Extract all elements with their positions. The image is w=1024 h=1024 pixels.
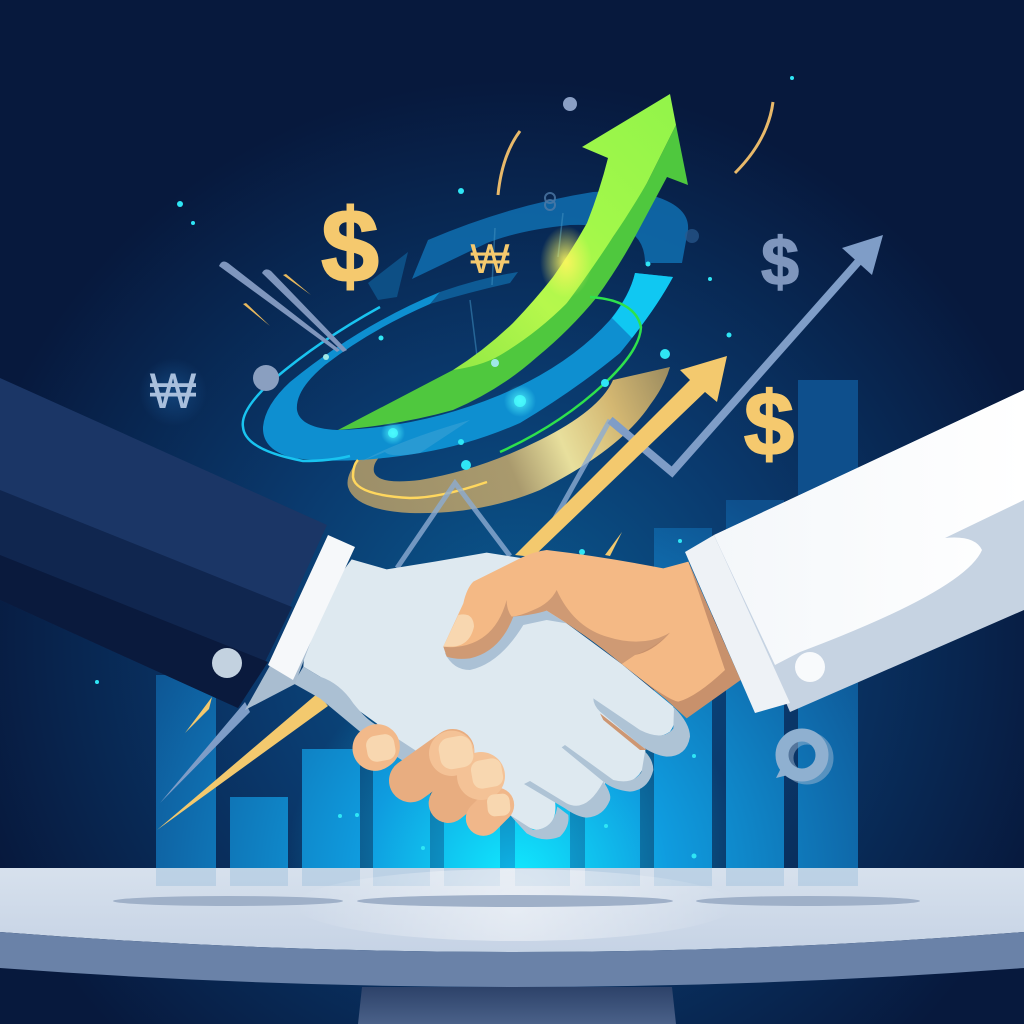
skin sliver under finger [600, 713, 647, 750]
right arm back shading [622, 562, 741, 718]
bottom finger three [448, 776, 482, 803]
right cuff [685, 535, 790, 713]
bottom finger four [483, 805, 497, 818]
dollar sign gold right: $ [744, 375, 794, 475]
floating circles [253, 97, 699, 391]
nails [365, 733, 511, 817]
gold arrow [157, 356, 727, 830]
left cuff [245, 535, 355, 710]
bottom finger two [411, 751, 453, 781]
finger three shadow [524, 781, 610, 818]
thin green orbit [500, 297, 641, 452]
low centre glow [280, 640, 750, 875]
left sleeve [0, 378, 327, 708]
speech ring icon [776, 735, 827, 778]
finger four shadow [510, 807, 569, 839]
skin hand [443, 550, 725, 702]
table shadows [113, 895, 920, 907]
table edge [0, 932, 1024, 987]
finger one shadow [593, 698, 690, 757]
trend line with arrow [397, 235, 883, 568]
won sign pale [139, 358, 207, 426]
table top [0, 868, 1024, 952]
particles [95, 76, 794, 858]
thumb shadow [445, 611, 567, 670]
pedestal [358, 987, 676, 1024]
lock icon faint [545, 193, 555, 210]
ring nodes [323, 354, 536, 445]
thin blue ring band [430, 272, 518, 304]
thumb nail [443, 614, 474, 647]
won sign pale: ₩ [149, 363, 197, 419]
won sign gold: ₩ [470, 235, 510, 282]
upper blue ring band [412, 192, 688, 279]
gold ring [348, 367, 670, 513]
dark ring fragment [368, 252, 408, 300]
thin cyan orbit [243, 307, 380, 461]
bright ring highlight [612, 273, 673, 338]
bar chart [156, 380, 858, 870]
bottom finger one [375, 747, 377, 748]
white hand [303, 553, 675, 830]
dollar sign large gold: $ [321, 189, 379, 305]
finger highlights [429, 731, 505, 800]
translucent sweep [360, 420, 470, 462]
hand lower shadow [293, 667, 420, 763]
skin fold shadow [443, 560, 670, 664]
bar reflections [156, 868, 858, 886]
streaks [219, 102, 773, 352]
faint vertical streaks [470, 213, 563, 380]
thin yellow orbit [353, 460, 487, 498]
right sleeve [714, 390, 1024, 712]
left cuff button [212, 648, 242, 678]
handshake [293, 550, 741, 839]
grey wedge streak [160, 702, 250, 803]
finger two shadow [562, 745, 653, 792]
green growth arrow [338, 94, 688, 430]
table glow [295, 869, 735, 941]
right cuff button [795, 652, 825, 682]
main blue ring [263, 273, 673, 461]
dollar sign blue-grey: $ [761, 224, 799, 300]
